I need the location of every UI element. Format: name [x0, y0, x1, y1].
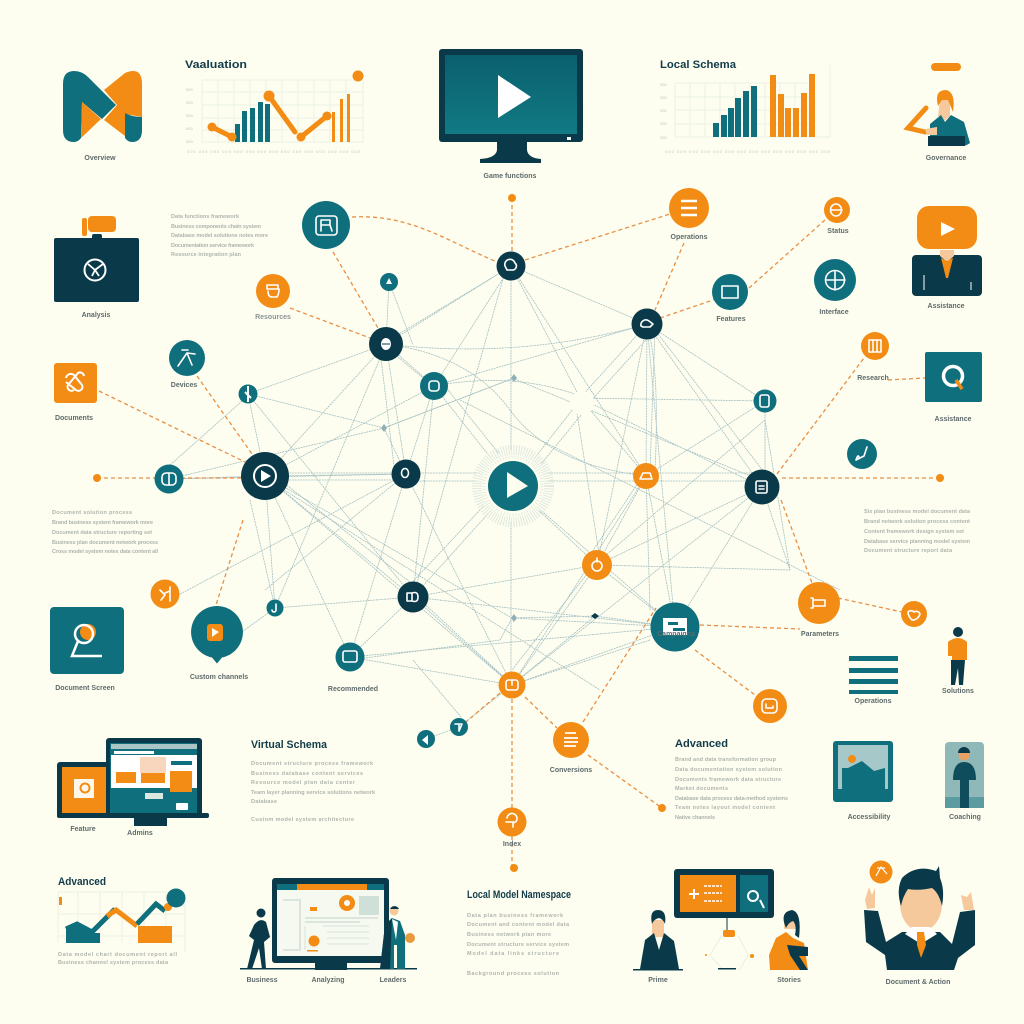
text block: right: Six plan business model document data [864, 509, 971, 515]
chart: local schema: 000 [660, 108, 667, 113]
text block: right: Content framework design system set [864, 529, 964, 535]
node: orange left lower [150, 580, 180, 608]
node: top hub [496, 252, 526, 280]
icon: presenter with play head [912, 206, 982, 296]
label: Game functions [484, 173, 537, 180]
text block: advanced: Team notes layout model content [675, 805, 775, 811]
text block: virtual schema: Resource model plan data center [251, 780, 356, 786]
text block: right: Brand network solution process content [864, 519, 970, 525]
dashed orange connectors [97, 198, 940, 868]
icon: magnifier card [925, 352, 982, 402]
text block: advanced: Documents framework data structure [675, 777, 781, 783]
node: orange left top [256, 274, 290, 308]
text block: upper left: Documentation service framework [171, 243, 255, 249]
text block: virtual schema [251, 739, 376, 823]
text block: left: Document solution process [52, 510, 132, 516]
icon: devices bottom left [57, 738, 209, 826]
chart: local schema: Local Schema [660, 59, 737, 71]
text block: advanced: Database data process data-method systems [675, 796, 788, 802]
chart: top left: 000 [186, 126, 193, 131]
label: Devices [171, 382, 197, 389]
node: orange lower [582, 550, 612, 580]
node: large teal lower right [650, 602, 700, 652]
person left [633, 910, 683, 970]
label: Features [716, 316, 746, 323]
text block: advanced: Advanced [675, 738, 728, 750]
icon: teal card [50, 607, 124, 674]
label: Stories [777, 977, 801, 984]
label: Parameters [801, 631, 839, 638]
label: Coaching [949, 814, 981, 821]
chart: top left [185, 59, 364, 154]
node: left hub play [241, 452, 289, 500]
text block: local model: Document structure service system [467, 942, 569, 948]
text block: advanced: Native channels [675, 815, 715, 821]
label: Accessibility [848, 814, 891, 821]
pale junction blob [570, 391, 594, 415]
chart: advanced bottom left: Business channel system process data [58, 960, 169, 966]
label: Index [503, 841, 521, 848]
label: Resources [255, 314, 291, 321]
chart: top left: 000 [186, 100, 193, 105]
label: Assistance [935, 416, 972, 423]
chart: top left: 000 000 000 000 000 000 000 000 000 000 000 000 000 000 000 [187, 149, 361, 154]
text block: advanced: Market documents [675, 786, 728, 792]
person left [247, 908, 270, 969]
text block: local model: Model data links structure [467, 951, 559, 957]
text block: virtual schema: Document structure process framework [251, 761, 374, 767]
label: Conversions [550, 767, 592, 774]
node: teal devices [169, 340, 205, 376]
chart: top left: Vaaluation [185, 59, 247, 71]
network nodes [150, 188, 927, 836]
node: orange far right [901, 601, 927, 627]
node: small teal beside [450, 718, 468, 736]
icon: top left logo [63, 71, 142, 142]
node: orange bottom hub [498, 672, 526, 698]
node: right hub [744, 470, 780, 504]
text block: virtual schema: Virtual Schema [251, 739, 328, 751]
text block: left: Business plan document network process [52, 540, 158, 546]
node: mid dark [392, 460, 420, 488]
label: Assistance [928, 303, 965, 310]
chart: advanced bottom left: Data model chart document report all [58, 952, 177, 958]
label: Interface [819, 309, 849, 316]
icon: presentation with two people [633, 869, 808, 970]
label: Status [827, 228, 849, 235]
text block: upper left: Resource integration plan [171, 252, 242, 258]
chart: top left: 000 [186, 113, 193, 118]
label: Admins [127, 830, 153, 837]
text block: advanced [675, 738, 788, 821]
text block: virtual schema: Business database content services [251, 771, 363, 777]
text block: virtual schema: Database [251, 799, 277, 805]
label: Solutions [942, 688, 974, 695]
label: Campaigns [657, 631, 695, 638]
text block: local model: Data plan business framework [467, 913, 564, 919]
label: Document & Action [886, 979, 950, 986]
label: Operations [671, 234, 708, 241]
node: orange parameters [798, 582, 840, 624]
node: small figure [238, 384, 258, 404]
node: right teal small [754, 390, 776, 412]
chart: local schema: 000 [660, 121, 667, 126]
node: upper right hub [632, 308, 662, 340]
icon: monitor with play [439, 49, 583, 163]
icon: presenter top right [908, 63, 970, 146]
node: upper left hub [369, 327, 403, 361]
text block: local model [467, 889, 571, 977]
icon: teal landscape picture [833, 741, 893, 802]
icon: list bars [849, 656, 898, 694]
text block: local model: Business network plan more [467, 932, 551, 938]
chart: top left: 000 [186, 87, 193, 92]
label: Prime [648, 977, 668, 984]
node: tiny teal [266, 600, 284, 616]
text block: right [864, 509, 971, 554]
small labels around the network [171, 228, 889, 848]
label: Feature [70, 826, 96, 833]
network mesh of dotted lines [169, 266, 840, 739]
label: Operations [855, 698, 892, 705]
node: teal top large [302, 201, 350, 249]
chart: local schema: 000 [660, 95, 667, 100]
text block: left [52, 510, 158, 555]
icon: cheering man [864, 860, 975, 970]
node: dark lower left [398, 582, 428, 612]
node: inner teal [420, 372, 448, 400]
label: Leaders [380, 977, 407, 984]
text block: right: Database service planning model system [864, 539, 970, 545]
icon: large monitor with two people [240, 878, 417, 970]
text block: local model: Document and content model data [467, 922, 570, 928]
node: left small [154, 464, 184, 494]
text block: advanced: Brand and data transformation group [675, 757, 777, 763]
label: Recommended [328, 686, 378, 693]
node: orange lower right [753, 689, 787, 723]
end dots [93, 194, 944, 872]
text block: virtual schema: Team layer planning service solutions network [251, 790, 376, 796]
node: orange conversions [553, 722, 589, 758]
node: teal frame [712, 274, 748, 310]
node: orange research [861, 332, 889, 360]
small mesh junctions [381, 374, 599, 622]
label: Documents [55, 415, 93, 422]
chart: local schema: 000 [660, 135, 667, 140]
label: Research [857, 375, 889, 382]
label: Analysis [82, 312, 111, 319]
node: small teal top [380, 273, 398, 291]
text block: left: Brand business system framework more [52, 520, 153, 526]
node: orange index [498, 808, 526, 836]
text block: left: Document data structure reporting set [52, 530, 152, 536]
text block: upper left [171, 214, 268, 258]
label: Business [246, 977, 278, 984]
node: pair small teal [417, 730, 435, 748]
icon: standing person orange [948, 627, 967, 685]
text block: advanced: Data documentation system solution [675, 767, 783, 773]
label: Overview [84, 155, 116, 162]
node: orange list [669, 188, 709, 228]
text block: upper left: Data functions framework [171, 214, 240, 220]
node: teal lower left [336, 642, 364, 672]
node: teal globe [814, 259, 856, 301]
central play node [477, 450, 549, 522]
chart: advanced bottom left [58, 876, 186, 966]
person right [380, 906, 415, 969]
icon: orange square [54, 363, 97, 403]
chart: local schema: 000 000 000 000 000 000 000 000 000 000 000 000 000 000 [665, 149, 831, 154]
text block: upper left: Business components chain system [171, 224, 261, 230]
text block: right: Document structure report data [864, 548, 953, 554]
icon: person card [945, 742, 984, 808]
chart: local schema [660, 59, 831, 154]
icon: briefcase [54, 216, 139, 302]
chart: top left: 000 [186, 139, 193, 144]
node: orange mid [633, 463, 659, 489]
text block: virtual schema: Custom model system architecture [251, 817, 354, 823]
label: Document Screen [55, 685, 115, 692]
text block: local model: Background process solution [467, 971, 560, 977]
person right [769, 910, 808, 970]
chart: local schema: 000 [660, 82, 667, 87]
node: teal pin large [191, 606, 243, 664]
text block: left: Cross model system notes data content all [52, 549, 158, 555]
node: orange status [824, 197, 850, 223]
node: teal check [847, 439, 877, 469]
chart: advanced bottom left: Advanced [58, 876, 106, 888]
text block: local model: Local Model Namespace [467, 889, 571, 901]
label: Governance [926, 155, 966, 162]
label: Analyzing [311, 977, 345, 984]
label: Custom channels [190, 674, 248, 681]
text block: upper left: Database model solutions notes more [171, 233, 268, 239]
